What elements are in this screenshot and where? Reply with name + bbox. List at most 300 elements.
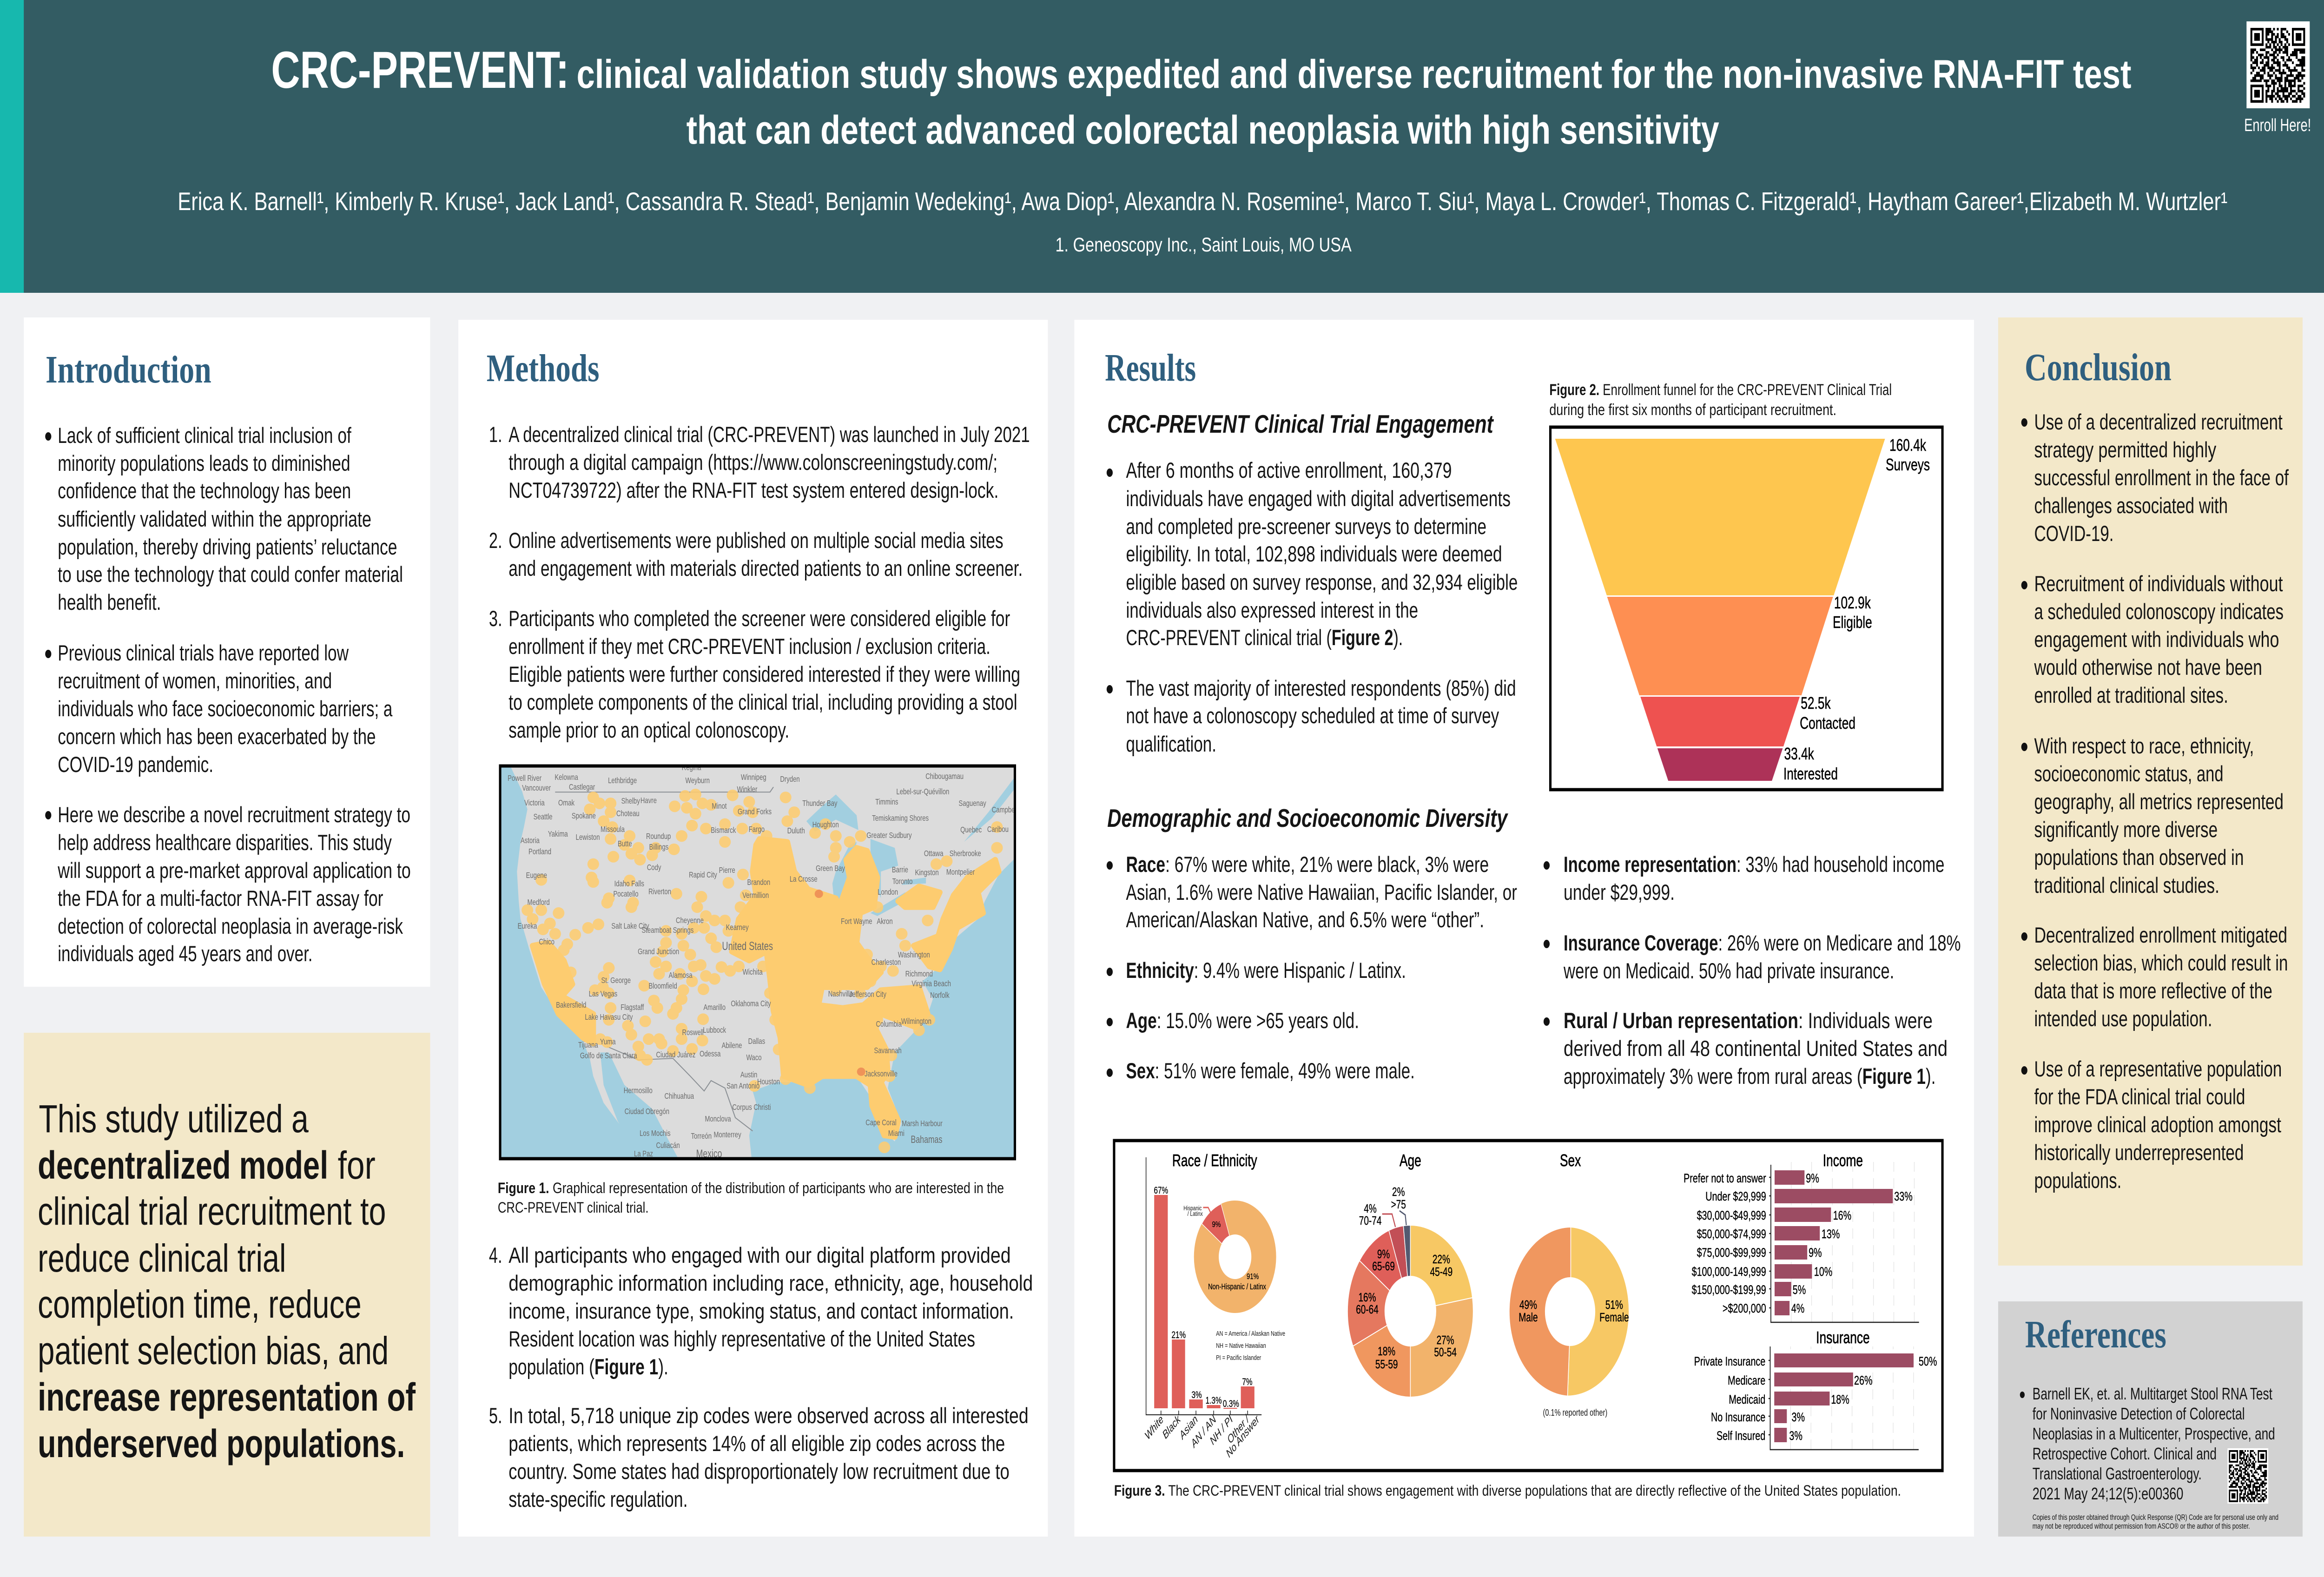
figure 1: participant map: Chico — [539, 937, 555, 947]
figure 1: participant map: Houston — [757, 1077, 780, 1087]
figure 1: participant map: Caribou — [987, 825, 1009, 834]
intro bullet 3: detection of colorectal neoplasia in average-risk — [58, 914, 403, 938]
chart: race bars: Black — [1161, 1412, 1182, 1441]
figure 1: participant map: Montpelier — [946, 868, 975, 877]
chart: insurance bars: Private Insurance — [1694, 1355, 1765, 1369]
panel: introduction — [24, 317, 430, 987]
conclusion bullet 3: traditional clinical studies. — [2034, 873, 2219, 897]
legend: race abbreviations: NH = Native Hawaiian — [1216, 1341, 1266, 1349]
chart: income bars: Prefer not to answer — [1684, 1172, 1766, 1186]
chart: sex donut: Female — [1599, 1310, 1629, 1324]
method step 2 — [489, 528, 1023, 581]
funnel stage: interested — [1657, 744, 1838, 783]
legend: race abbreviations: AN = America / Alaskan Native — [1216, 1329, 1285, 1337]
chart: income bars: $30,000-$49,999 — [1697, 1209, 1766, 1223]
callout text: for — [338, 1143, 376, 1187]
method step 5 — [489, 1404, 1029, 1511]
chart: age donut: 65-69 — [1372, 1259, 1395, 1273]
chart: insurance bars: Medicare — [1728, 1374, 1765, 1388]
figure 1: participant map: Washington — [898, 950, 930, 960]
intro bullet 3: the FDA for a multi-factor RNA-FIT assay for — [58, 886, 383, 911]
figure 1: participant map: Corpus Christi — [732, 1103, 771, 1112]
callout text: increase representation of — [38, 1375, 416, 1419]
title: clinical validation study shows expedited and diverse recruitment for the non-invasive RNA-FIT test — [576, 52, 2132, 96]
method step 2: and engagement with materials directed patients to an online screener. — [508, 556, 1023, 581]
funnel stage: surveys — [1555, 435, 1930, 595]
chart: insurance bars: Medicaid — [1729, 1393, 1765, 1407]
figure 1 caption: Figure 1. Graphical representation of the distribution of participants who are interested in the — [498, 1180, 1004, 1196]
title: CRC-PREVENT: — [271, 40, 569, 99]
figure 1: participant map: Havre — [640, 796, 657, 805]
chart: income bars: $100,000-149,999 — [1692, 1265, 1766, 1279]
results bullet: enrollment: After 6 months of active enrollment, 160,379 — [1126, 458, 1452, 482]
figure 1: participant map: Charleston — [872, 958, 901, 967]
figure 1: participant map: Richmond — [905, 970, 933, 979]
intro bullet 2: recruitment of women, minorities, and — [58, 669, 332, 693]
funnel stage: surveys: 160.4k — [1889, 435, 1926, 455]
method step 3: 3. — [489, 607, 502, 631]
chart: age donut: 2% — [1392, 1185, 1405, 1199]
legend: race abbreviations — [1216, 1329, 1285, 1361]
chart: ethnicity donut: Non-Hispanic / Latinx — [1208, 1282, 1266, 1292]
figure 1: participant map: Dallas — [748, 1037, 765, 1046]
intro bullet 2: concern which has been exacerbated by the — [58, 725, 376, 749]
conclusion bullet 1: Use of a decentralized recruitment — [2034, 410, 2283, 434]
figure 1: participant map: Bismarck — [711, 826, 736, 835]
figure 1: participant map: Choteau — [616, 809, 640, 818]
chart: insurance bars: 3% — [1789, 1429, 1802, 1443]
figure 1: participant map: Salt Lake City — [611, 922, 649, 931]
results bullet: rural urban: approximately 3% were from rural areas ( Figure 1). — [1564, 1064, 1935, 1089]
figure 1: participant map: Chihuahua — [664, 1092, 694, 1101]
conclusion bullet 5: populations. — [2034, 1168, 2121, 1193]
figure 1: participant map: Columbia — [876, 1020, 902, 1029]
chart: income bars: 13% — [1822, 1227, 1840, 1241]
figure 2 caption: during the first six months of participant recruitment. — [1549, 401, 1836, 419]
figure 2 caption: Figure 2. Enrollment funnel for the CRC-PREVENT Clinical Trial — [1549, 381, 1892, 399]
conclusion bullet 5: improve clinical adoption amongst — [2034, 1113, 2281, 1137]
results bullet: enrollment: CRC-PREVENT clinical trial (Figure 2). — [1126, 626, 1403, 650]
figure 1: participant map: London — [878, 888, 898, 897]
method step 4: population (Figure 1). — [508, 1355, 668, 1379]
conclusion bullet 5: for the FDA clinical trial could — [2034, 1085, 2245, 1109]
introduction background — [24, 317, 430, 987]
method step 1: NCT04739722) after the RNA-FIT test system entered design-lock. — [508, 478, 998, 502]
conclusion background — [1998, 317, 2303, 1266]
figure 1: participant map: Jefferson City — [849, 990, 886, 999]
figure 1: participant map: Austin — [740, 1070, 757, 1080]
results bullet: colonoscopy — [1107, 676, 1516, 756]
chart: insurance bars — [1694, 1328, 1937, 1450]
figure 1 caption: CRC-PREVENT clinical trial. — [498, 1199, 648, 1216]
citation: 2021 May 24;12(5):e00360 — [2033, 1484, 2183, 1503]
figure 1: participant map: Monterrey — [713, 1130, 741, 1140]
method step 2: 2. — [489, 528, 502, 553]
callout text — [38, 1097, 416, 1465]
figure 1: participant map: Steamboat Springs — [642, 926, 693, 935]
results bullet: enrollment — [1107, 458, 1518, 650]
conclusion bullet 1: strategy permitted highly — [2034, 438, 2217, 462]
figure 1: participant map: Portland — [528, 847, 551, 857]
method step 5: patients, which represents 14% of all eligible zip codes across the — [508, 1432, 1005, 1456]
chart: insurance bars: Self Insured — [1717, 1429, 1765, 1443]
figure 1: participant map: Shelby — [621, 797, 640, 806]
conclusion bullet 1: successful enrollment in the face of — [2034, 466, 2289, 490]
figure 1: participant map: Lewiston — [576, 833, 600, 842]
figure 1: participant map: Temiskaming Shores — [872, 814, 929, 823]
method step 1: A decentralized clinical trial (CRC-PREVENT) was launched in July 2021 — [508, 422, 1030, 447]
title — [271, 40, 2132, 152]
figure 1: participant map: Bahamas — [911, 1135, 942, 1146]
chart: age donut: 4% — [1364, 1201, 1377, 1215]
results bullet: enrollment: and completed pre-screener surveys to determine — [1126, 515, 1486, 539]
conclusion bullet 5 — [2021, 1057, 2282, 1193]
callout background — [24, 1033, 430, 1537]
figure 1: participant map: Duluth — [787, 826, 805, 836]
figure 1: participant map: Sherbrooke — [950, 849, 981, 858]
chart: insurance bars: Insurance — [1816, 1328, 1870, 1347]
chart: race bars: White — [1143, 1412, 1165, 1442]
chart: income bars: 16% — [1833, 1209, 1851, 1223]
conclusion bullet 2 — [2021, 572, 2284, 707]
chart: race bars: Race / Ethnicity — [1172, 1151, 1257, 1170]
figure 1: participant map: Powell River — [508, 774, 541, 783]
figure 1: participant map: Barrie — [892, 865, 908, 875]
figure 1: participant map: Astoria — [521, 836, 540, 845]
results bullet: insurance — [1544, 931, 1961, 983]
chart: ethnicity donut: 9% — [1212, 1220, 1221, 1229]
chart: insurance bars: 18% — [1831, 1393, 1849, 1407]
copyright note: may not be reproduced without permission from ASCO® or the author of this poster. — [2033, 1522, 2250, 1531]
figure 1: participant map: Rapid City — [689, 871, 717, 880]
figure 1: participant map: Grand Forks — [738, 807, 772, 817]
method step 5: country. Some states had disproportionately low recruitment due to — [508, 1459, 1010, 1484]
figure 1: participant map: Grand Junction — [638, 947, 679, 957]
conclusion bullet 1 — [2021, 410, 2289, 546]
figure 1: participant map: Kingston — [915, 868, 939, 878]
figure 1: participant map: La Paz — [634, 1149, 653, 1159]
figure 1: participant map: Bloomfield — [648, 982, 677, 991]
chart: race bars: 7% — [1242, 1376, 1253, 1387]
subheading: diversity: Demographic and Socioeconomic Diversity — [1107, 804, 1508, 833]
figure 1: participant map: San Antonio — [726, 1082, 759, 1091]
chart: sex donut: 49% — [1519, 1298, 1537, 1312]
figure 1: participant map: Victoria — [524, 798, 545, 808]
figure 1: participant map: Dryden — [780, 775, 800, 784]
conclusion bullet 3: populations than observed in — [2034, 845, 2244, 870]
conclusion bullet 3: With respect to race, ethnicity, — [2034, 734, 2254, 758]
figure 1: participant map: Kelowna — [555, 773, 578, 782]
method step 2: Online advertisements were published on multiple social media sites — [508, 528, 1004, 553]
figure 1: participant map: Timmins — [875, 798, 898, 807]
method step 4: 4. — [489, 1243, 502, 1267]
affiliation: 1. Geneoscopy Inc., Saint Louis, MO USA — [1055, 233, 1352, 256]
figure 1: participant map: Spokane — [572, 812, 596, 821]
heading: references: References — [2025, 1313, 2166, 1356]
subheading: engagement: CRC-PREVENT Clinical Trial Engagement — [1107, 410, 1494, 439]
icon: reference QR code — [2227, 1448, 2268, 1504]
figure 1: participant map: Waco — [746, 1053, 762, 1062]
citation: Translational Gastroenterology. — [2033, 1464, 2202, 1483]
heading: conclusion: Conclusion — [2025, 345, 2172, 389]
title: that can detect advanced colorectal neoplasia with high sensitivity — [687, 107, 1719, 152]
funnel stage: eligible: Eligible — [1833, 613, 1872, 632]
citation: for Noninvasive Detection of Colorectal — [2033, 1404, 2245, 1423]
chart: income bars: 5% — [1793, 1283, 1806, 1297]
chart: income bars: 33% — [1894, 1190, 1913, 1204]
conclusion bullet 1: challenges associated with — [2034, 494, 2228, 518]
figure 1: participant map: Akron — [877, 917, 893, 926]
intro bullet 1: sufficiently validated within the appropriate — [58, 507, 371, 531]
callout text: underserved populations. — [38, 1422, 405, 1465]
figure 1: participant map: Omak — [558, 798, 574, 808]
chart: income bars: 10% — [1814, 1265, 1832, 1279]
figure 1: participant map: Virginia Beach — [911, 979, 951, 989]
intro bullet 3: will support a pre-market approval application to — [57, 858, 411, 883]
method step 4: Resident location was highly representative of the United States — [508, 1327, 975, 1351]
results bullet: insurance: were on Medicaid. 50% had private insurance. — [1563, 959, 1894, 983]
callout text: clinical trial recruitment to — [38, 1189, 386, 1233]
figure 1: participant map: Norfolk — [930, 991, 950, 1000]
chart: race bars: Other / — [1225, 1412, 1252, 1446]
intro bullet 1: Lack of sufficient clinical trial inclusion of — [58, 423, 351, 448]
figure 1: participant map: Oklahoma City — [731, 999, 771, 1009]
method step 4: demographic information including race, ethnicity, age, household — [508, 1271, 1033, 1295]
citation: Retrospective Cohort. Clinical and — [2033, 1444, 2217, 1463]
conclusion bullet 3 — [2021, 734, 2284, 897]
intro bullet 1: health benefit. — [58, 590, 161, 614]
chart: age donut: 45-49 — [1430, 1265, 1452, 1279]
chart: sex donut — [1509, 1151, 1629, 1418]
figure 1: participant map: La Crosse — [790, 875, 818, 884]
results bullet: rural urban — [1544, 1009, 1948, 1089]
chart: income bars: $50,000-$74,999 — [1697, 1227, 1766, 1241]
figure 1: participant map: Wilmington — [901, 1017, 931, 1026]
results bullet: race: Asian, 1.6% were Native Hawaiian, Pacific Islander, or — [1126, 880, 1517, 904]
chart: age donut: 18% — [1378, 1344, 1395, 1358]
chart: age donut: 22% — [1433, 1252, 1450, 1266]
chart: income bars: $150,000-$199,99 — [1692, 1283, 1766, 1297]
methods background — [458, 320, 1048, 1537]
intro bullet 3: help address healthcare disparities. This study — [58, 831, 392, 855]
chart: race bars: Asian — [1177, 1412, 1200, 1443]
figure 1: participant map: Monclova — [705, 1115, 731, 1124]
chart: age donut: 55-59 — [1375, 1357, 1398, 1371]
header banner — [0, 0, 2324, 293]
conclusion bullet 4: data that is more reflective of the — [2034, 979, 2272, 1003]
method step 3: to complete components of the clinical trial, including providing a stool — [508, 690, 1017, 714]
figure 1: participant map — [500, 763, 1019, 1168]
intro bullet 1 — [45, 423, 403, 614]
callout text: This study utilized a — [39, 1097, 309, 1141]
callout text: reduce clinical trial — [38, 1236, 286, 1280]
copyright note: Copies of this poster obtained through Quick Response (QR) Code are for personal use only and — [2033, 1513, 2278, 1522]
funnel frame — [1551, 427, 1942, 790]
method step 4 — [489, 1243, 1033, 1379]
results bullet: race — [1107, 852, 1517, 932]
figure 1: participant map: Toronto — [892, 877, 913, 886]
figure 1: participant map: Miami — [888, 1129, 905, 1138]
method step 5: In total, 5,718 unique zip codes were observed across all interested — [508, 1404, 1029, 1428]
conclusion bullet 5: Use of a representative population — [2034, 1057, 2282, 1081]
figure 1: participant map: Lubbock — [703, 1026, 726, 1035]
intro bullet 2: Previous clinical trials have reported low — [58, 641, 349, 665]
figure 1: participant map: Kearney — [726, 923, 749, 932]
figure 1: participant map: Eureka — [518, 922, 537, 931]
method step 3: Participants who completed the screener were considered eligible for — [508, 607, 1010, 631]
intro bullet 1: population, thereby driving patients’ reluctance — [58, 535, 397, 559]
figure 1: participant map: Jacksonville — [865, 1069, 898, 1079]
results bullet: enrollment: eligible based on survey response, and 32,934 eligible — [1126, 570, 1518, 594]
method step 3 — [489, 607, 1020, 742]
figure 1: participant map: Saguenay — [959, 799, 986, 808]
method step 3: Eligible patients were further considered interested if they were willing — [508, 662, 1020, 686]
chart: age donut: 16% — [1359, 1290, 1376, 1304]
method step 3: enrollment if they met CRC-PREVENT inclusion / exclusion criteria. — [508, 634, 990, 659]
chart: race bars: NH / PI — [1208, 1412, 1235, 1447]
authors: Erica K. Barnell¹, Kimberly R. Kruse¹, Jack Land¹, Cassandra R. Stead¹, Benjamin Wedeking¹, Awa Diop¹, Alexandra N. Rosemine¹, Marco T. Siu¹, Maya L. Crowder¹, Thomas C. Fitzgerald¹, Haytham Gareer¹,Elizabeth M. Wurtzler¹ — [178, 187, 2227, 216]
figure 1: participant map: Idaho Falls — [614, 879, 644, 889]
figure 1: participant map: Pocatello — [613, 890, 639, 899]
figure 1: participant map: Campbell — [992, 805, 1017, 815]
chart: age donut: 60-64 — [1356, 1302, 1379, 1316]
results bullet: income — [1544, 852, 1944, 904]
conclusion bullet 4: Decentralized enrollment mitigated — [2034, 923, 2287, 947]
copyright note — [2033, 1513, 2278, 1531]
callout text: completion time, reduce — [38, 1282, 362, 1326]
chart: age donut: 50-54 — [1434, 1345, 1457, 1359]
figure 1: participant map: Weyburn — [686, 776, 710, 785]
figure 1: participant map: Greater Sudbury — [866, 831, 912, 840]
figure 1: participant map: Vermillion — [742, 891, 769, 900]
chart: race bars: 67% — [1154, 1185, 1168, 1196]
results bullet: age: Age: 15.0% were >65 years old. — [1126, 1009, 1359, 1033]
method step 4: income, insurance type, smoking status, and contact information. — [508, 1299, 1014, 1323]
funnel stage: contacted — [1640, 693, 1855, 746]
callout text: patient selection bias, and — [38, 1329, 389, 1372]
funnel stage: eligible — [1607, 593, 1872, 695]
chart: age donut: 9% — [1377, 1247, 1390, 1261]
figure 1: participant map: Lake Havasu City — [585, 1013, 633, 1022]
figure 1: participant map: Yakima — [548, 830, 568, 839]
chart: race bars: 21% — [1171, 1329, 1186, 1340]
figure 1: participant map: Winnipeg — [741, 773, 766, 782]
figure 1: participant map: Pierre — [719, 866, 735, 875]
chart: sex donut: 51% — [1605, 1298, 1623, 1312]
chart: insurance bars: 50% — [1919, 1355, 1937, 1369]
funnel stage: interested: Interested — [1783, 764, 1838, 783]
figure 1: participant map: Eugene — [526, 871, 547, 880]
chart: race bars: 3% — [1191, 1389, 1202, 1400]
figure 1: participant map: Missoula — [601, 825, 625, 834]
chart: income bars: 9% — [1806, 1172, 1819, 1186]
chart: income bars — [1684, 1151, 1919, 1322]
heading: introduction: Introduction — [46, 348, 211, 391]
figure 1: participant map: Bakersfield — [556, 1001, 586, 1010]
figure 1: participant map: Wichita — [743, 968, 763, 977]
conclusion bullet 4: selection bias, which could result in — [2034, 951, 2288, 975]
chart: sex donut: Male — [1519, 1310, 1538, 1324]
conclusion bullet 2: a scheduled colonoscopy indicates — [2034, 600, 2284, 624]
results bullet: insurance: Insurance Coverage: 26% were on Medicare and 18% — [1564, 931, 1961, 955]
figure 2: enrollment funnel — [1551, 427, 1942, 790]
chart: ethnicity donut: 91% — [1247, 1272, 1259, 1281]
figure 1: participant map: Thunder Bay — [802, 799, 838, 808]
figure 1: participant map: Las Vegas — [589, 990, 617, 999]
figure 1: participant map: Lethbridge — [608, 776, 637, 785]
figure 1: participant map: Billings — [649, 843, 668, 852]
intro bullet 3: individuals aged 45 years and over. — [58, 942, 313, 966]
intro bullet 1: minority populations leads to diminished — [58, 451, 350, 475]
conclusion bullet 2: enrolled at traditional sites. — [2034, 683, 2228, 707]
chart: race bars: AN / AN — [1188, 1412, 1218, 1451]
intro bullet 3: Here we describe a novel recruitment strategy to — [58, 803, 410, 827]
chart: ethnicity donut: Hispanic — [1183, 1204, 1202, 1212]
figure 1: participant map: Marsh Harbour — [902, 1119, 943, 1128]
figure 1: participant map: Quebec — [960, 825, 982, 835]
funnel stage: contacted: Contacted — [1800, 713, 1855, 732]
figure 1: participant map: Ciudad Obregón — [625, 1107, 669, 1116]
figure 1: participant map: Cody — [647, 863, 661, 872]
results bullet: ethnicity: Ethnicity: 9.4% were Hispanic / Latinx. — [1126, 958, 1406, 983]
results bullet: colonoscopy: The vast majority of interested respondents (85%) did — [1126, 676, 1516, 700]
figure 1: participant map: Alamosa — [669, 971, 693, 980]
conclusion bullet 3: socioeconomic status, and — [2034, 762, 2224, 786]
intro bullet 1: to use the technology that could confer material — [58, 562, 403, 587]
figure 1: participant map: Roundup — [646, 832, 671, 841]
figure 1: participant map: Yuma — [600, 1037, 616, 1047]
intro bullet 1: confidence that the technology has been — [58, 479, 351, 503]
conclusion bullet 4: intended use population. — [2034, 1007, 2212, 1031]
method step 1: 1. — [489, 422, 502, 447]
chart: insurance bars: 26% — [1854, 1374, 1873, 1388]
conclusion bullet 2: Recruitment of individuals without — [2034, 572, 2283, 596]
chart: age donut: 27% — [1437, 1333, 1454, 1347]
method step 5: state-specific regulation. — [508, 1487, 688, 1511]
figure 1: participant map: Nashville — [828, 990, 853, 999]
chart: insurance bars: 3% — [1792, 1411, 1805, 1425]
conclusion bullet 1: COVID-19. — [2034, 521, 2114, 546]
figure 1: participant map: Minot — [712, 802, 727, 811]
intro bullet 2: COVID-19 pandemic. — [58, 752, 213, 777]
panel: references — [1998, 1301, 2303, 1537]
method step 1 — [489, 422, 1030, 502]
chart: age donut: Age — [1400, 1151, 1421, 1170]
conclusion bullet 2: engagement with individuals who — [2034, 627, 2279, 652]
method step 1: through a digital campaign (https://www.colonscreeningstudy.com/; — [508, 450, 997, 475]
conclusion bullet 2: would otherwise not have been — [2034, 655, 2262, 680]
figure 1: participant map: Cheyenne — [676, 916, 704, 925]
chart: income bars: >$200,000 — [1723, 1302, 1766, 1316]
heading: methods: Methods — [487, 346, 599, 389]
chart: sex donut: Sex — [1560, 1151, 1581, 1170]
figure 1: participant map: Los Mochis — [640, 1129, 671, 1138]
references background — [1998, 1301, 2303, 1537]
figure 1: participant map: Regina — [682, 763, 701, 772]
figure 1: participant map: Flagstaff — [621, 1003, 644, 1012]
figure 3 frame — [1114, 1141, 1942, 1471]
conclusion bullet 3: geography, all metrics represented — [2034, 790, 2284, 814]
chart: ethnicity donut — [1183, 1204, 1266, 1296]
conclusion bullet 4 — [2021, 923, 2288, 1031]
figure 1: participant map: Castlegar — [569, 783, 595, 792]
chart: income bars: 4% — [1791, 1302, 1804, 1316]
panel: methods — [458, 320, 1048, 1537]
panel: results — [1074, 320, 1974, 1537]
funnel stage: contacted: 52.5k — [1801, 693, 1831, 713]
icon: enroll QR code — [2246, 21, 2310, 108]
chart: sex donut: (0.1% reported other) — [1543, 1407, 1607, 1418]
